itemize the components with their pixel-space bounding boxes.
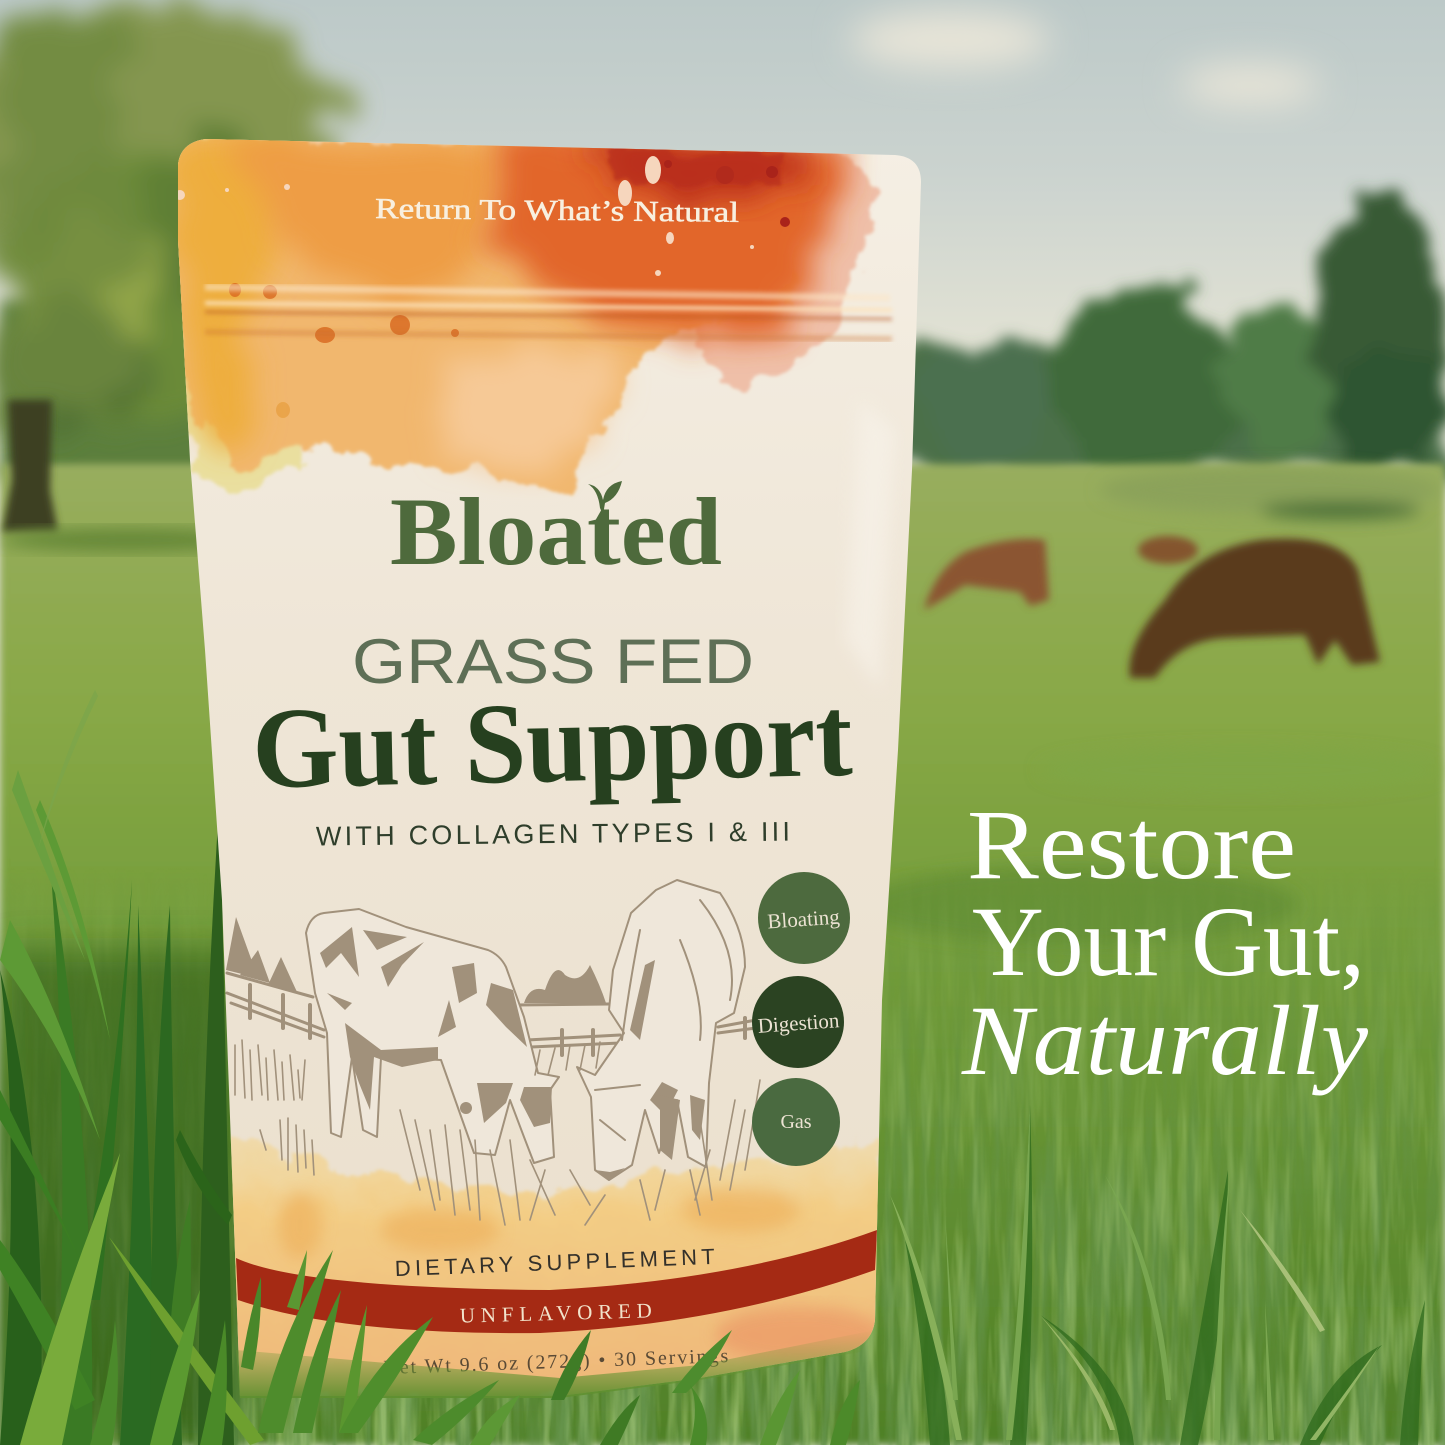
cow: large (1129, 536, 1380, 678)
grass texture field (0, 956, 1445, 1445)
badge: Digestion (752, 976, 844, 1068)
pouch crease highlights (850, 429, 884, 668)
tree trunk (2, 400, 58, 532)
badge: Bloating: Bloating (767, 904, 841, 934)
sky clouds (850, 12, 1320, 105)
watercolor top wash (165, 130, 878, 495)
illustration: cows grazing (226, 880, 760, 1225)
large left tree (0, 5, 340, 440)
brand logo: Bloated (390, 478, 722, 585)
cow: small (924, 539, 1049, 610)
pouch base fade (236, 1330, 875, 1398)
pouch zipper (205, 287, 892, 339)
badge: Digestion: Digestion (757, 1008, 841, 1038)
net weight label: Net Wt 9.6 oz (272g) • 30 Servings (383, 1345, 729, 1379)
right cow (577, 880, 745, 1180)
fence and horizon (227, 973, 756, 1047)
badge: Gas (752, 1078, 840, 1166)
dietary supplement label: DIETARY SUPPLEMENT (394, 1244, 715, 1281)
bottom wash (220, 1135, 885, 1400)
collagen line: WITH COLLAGEN TYPES I & III (316, 817, 790, 851)
distant tree line (890, 187, 1445, 483)
headline: Your Gut, (972, 886, 1365, 997)
headline: Restore (967, 789, 1296, 900)
badge: Bloating (758, 872, 850, 964)
left grass behind pouch (0, 690, 240, 1445)
foreground grass blades (20, 1105, 1380, 1445)
Gut Support: Gut Support (251, 673, 853, 812)
red band (236, 1230, 877, 1333)
GRASS FED: GRASS FED (352, 627, 754, 697)
icon: sprout (588, 481, 622, 515)
meadow (0, 464, 1445, 1445)
unflavored label: UNFLAVORED (460, 1298, 652, 1328)
paint splatter (175, 156, 754, 276)
grass strokes (235, 1040, 760, 1225)
right foreground grass behind headline (905, 1105, 1425, 1445)
pine trees and bushes (226, 917, 606, 1003)
tagline: Return To What’s Natural (375, 193, 739, 229)
product pouch (165, 130, 921, 1400)
headline: Naturally (961, 985, 1369, 1096)
trees behind left side (0, 300, 220, 480)
left cow (306, 909, 559, 1163)
headline (961, 789, 1369, 1096)
badge: Gas: Gas (780, 1111, 812, 1133)
